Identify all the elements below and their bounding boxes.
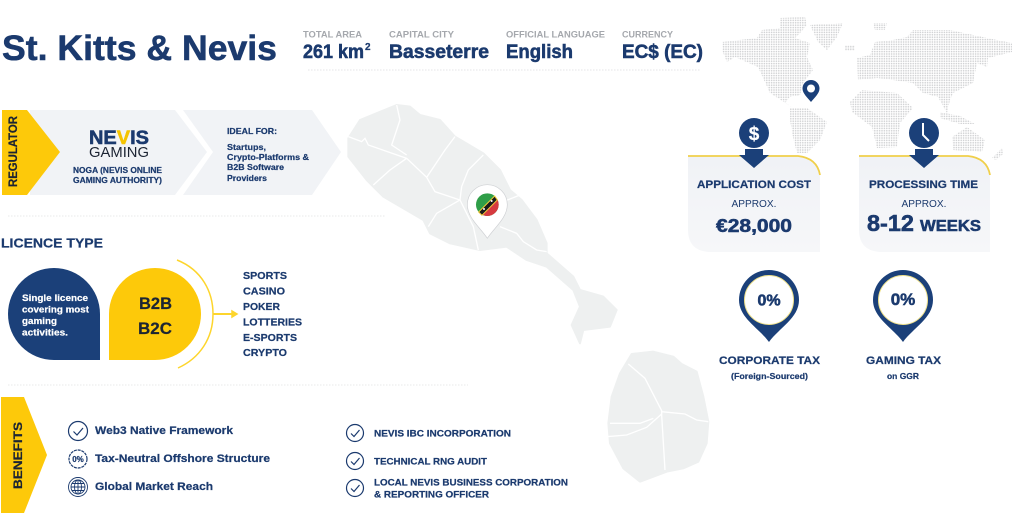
list: licence verticals: E-SPORTS [243,332,297,344]
icon: map location pin [802,80,820,102]
icon: clock with arrow [909,118,939,168]
text: web3: Web3 Native Framework [95,425,234,437]
card: application cost [688,118,820,252]
icon: dollar with arrow: $ [749,124,760,145]
text: NOGA [73,165,162,185]
stat: official language: OFFICIAL LANGUAGE [506,30,605,40]
text: RNG: TECHNICAL RNG AUDIT [374,456,487,468]
card: application cost: €28,000 [716,216,792,236]
drop: single licence [8,268,100,360]
list: licence verticals: POKER [243,301,280,313]
map: Nevis [607,352,708,482]
label: gaming tax: on GGR [887,371,919,381]
icon: check [68,422,88,440]
text: tax neutral: Tax-Neutral Offshore Structure [95,453,270,465]
stat: total area: 2 [365,42,371,53]
chevron: benefits label [1,397,47,513]
chevron: regulator label: REGULATOR [8,115,20,187]
text: local corporation: & REPORTING OFFICER [374,490,489,500]
stat: currency [622,30,703,63]
icon: check [346,424,364,442]
drop: B2B B2C [109,268,201,360]
panel: benefits [1,397,568,513]
chevron: ideal for: Startups, [227,142,266,152]
text: global reach: Global Market Reach [95,481,213,493]
icon: check [346,480,364,496]
chevron: benefits label: BENEFITS [13,422,25,489]
card: processing time: APPROX. [902,199,946,210]
drop: B2B B2C: B2C [138,319,172,338]
card: processing time: PROCESSING TIME [869,179,978,191]
card: processing time [859,118,990,252]
logo: Nevis Gaming: NEVIS [89,128,149,149]
chevron: ideal for: Crypto-Platforms & [227,152,309,162]
text: local corporation: LOCAL NEVIS BUSINESS CORPORATION [374,478,568,488]
text: NOGA: NOGA (NEVIS ONLINE [73,165,162,175]
map: St. Kitts [348,105,617,343]
chevron: regulator label [2,110,60,195]
card: application cost: APPLICATION COST [697,179,811,191]
chevron: ideal for [183,110,341,195]
icon: flag pin [467,185,507,238]
stat: currency: EC$ (EC) [622,42,703,63]
text: NOGA: GAMING AUTHORITY) [73,175,162,185]
stat: currency: CURRENCY [622,30,674,40]
panel: regulator [2,110,341,195]
drop: single licence: gaming [22,316,57,326]
pin: corporate tax: 0% [757,292,781,310]
label: corporate tax: (Foreign-Sourced) [731,371,808,381]
list: licence verticals [243,270,302,359]
text: IBC: NEVIS IBC INCORPORATION [374,428,511,440]
heading: licence type: LICENCE TYPE [1,236,103,250]
icon: 0% badge: 0% [72,455,84,464]
chevron: ideal for: IDEAL FOR: [227,126,277,136]
label: gaming tax: GAMING TAX [866,355,942,367]
card: processing time: 8-12 [867,210,914,236]
title: St. Kitts & Nevis [2,29,277,68]
arrow: arc to list [177,260,237,368]
drop: single licence: Single licence [22,293,88,303]
panel: licence type [8,260,302,368]
stat: total area: 261 km [303,42,364,63]
chevron: Nevis Gaming [30,110,207,195]
stat: capital city: CAPITAL CITY [389,30,455,40]
chevron: ideal for: Providers [227,173,267,183]
list: licence verticals: SPORTS [243,270,287,282]
stat: total area [303,30,371,63]
pin: corporate tax [739,270,799,342]
chevron: ideal for: B2B Software [227,162,284,172]
label: gaming tax [866,355,942,381]
drop: single licence: activities. [22,328,68,338]
card: processing time: WEEKS [920,218,981,235]
logo: Nevis Gaming: GAMING [89,145,149,161]
pin: gaming tax: 0% [891,290,915,309]
icon: 0% badge [69,450,87,468]
text: local corporation [374,478,568,500]
label: corporate tax: CORPORATE TAX [719,355,821,367]
drop: single licence: covering most [22,304,89,314]
world dot map [722,17,1012,160]
list: licence verticals: CASINO [243,286,285,298]
logo: Nevis Gaming [89,128,149,161]
drop: B2B B2C: B2B [139,294,172,313]
card: application cost: APPROX. [732,199,776,210]
icon: globe [68,478,88,496]
pin: gaming tax [873,270,933,342]
list: licence verticals: CRYPTO [243,347,287,359]
icon: check [346,452,364,470]
stat: official language [506,30,605,63]
stat: official language: English [506,42,573,63]
stat: total area: TOTAL AREA [303,30,362,40]
stat: capital city: Basseterre [389,42,489,63]
stat: capital city [389,30,489,63]
list: licence verticals: LOTTERIES [243,316,302,328]
label: corporate tax [719,355,821,381]
